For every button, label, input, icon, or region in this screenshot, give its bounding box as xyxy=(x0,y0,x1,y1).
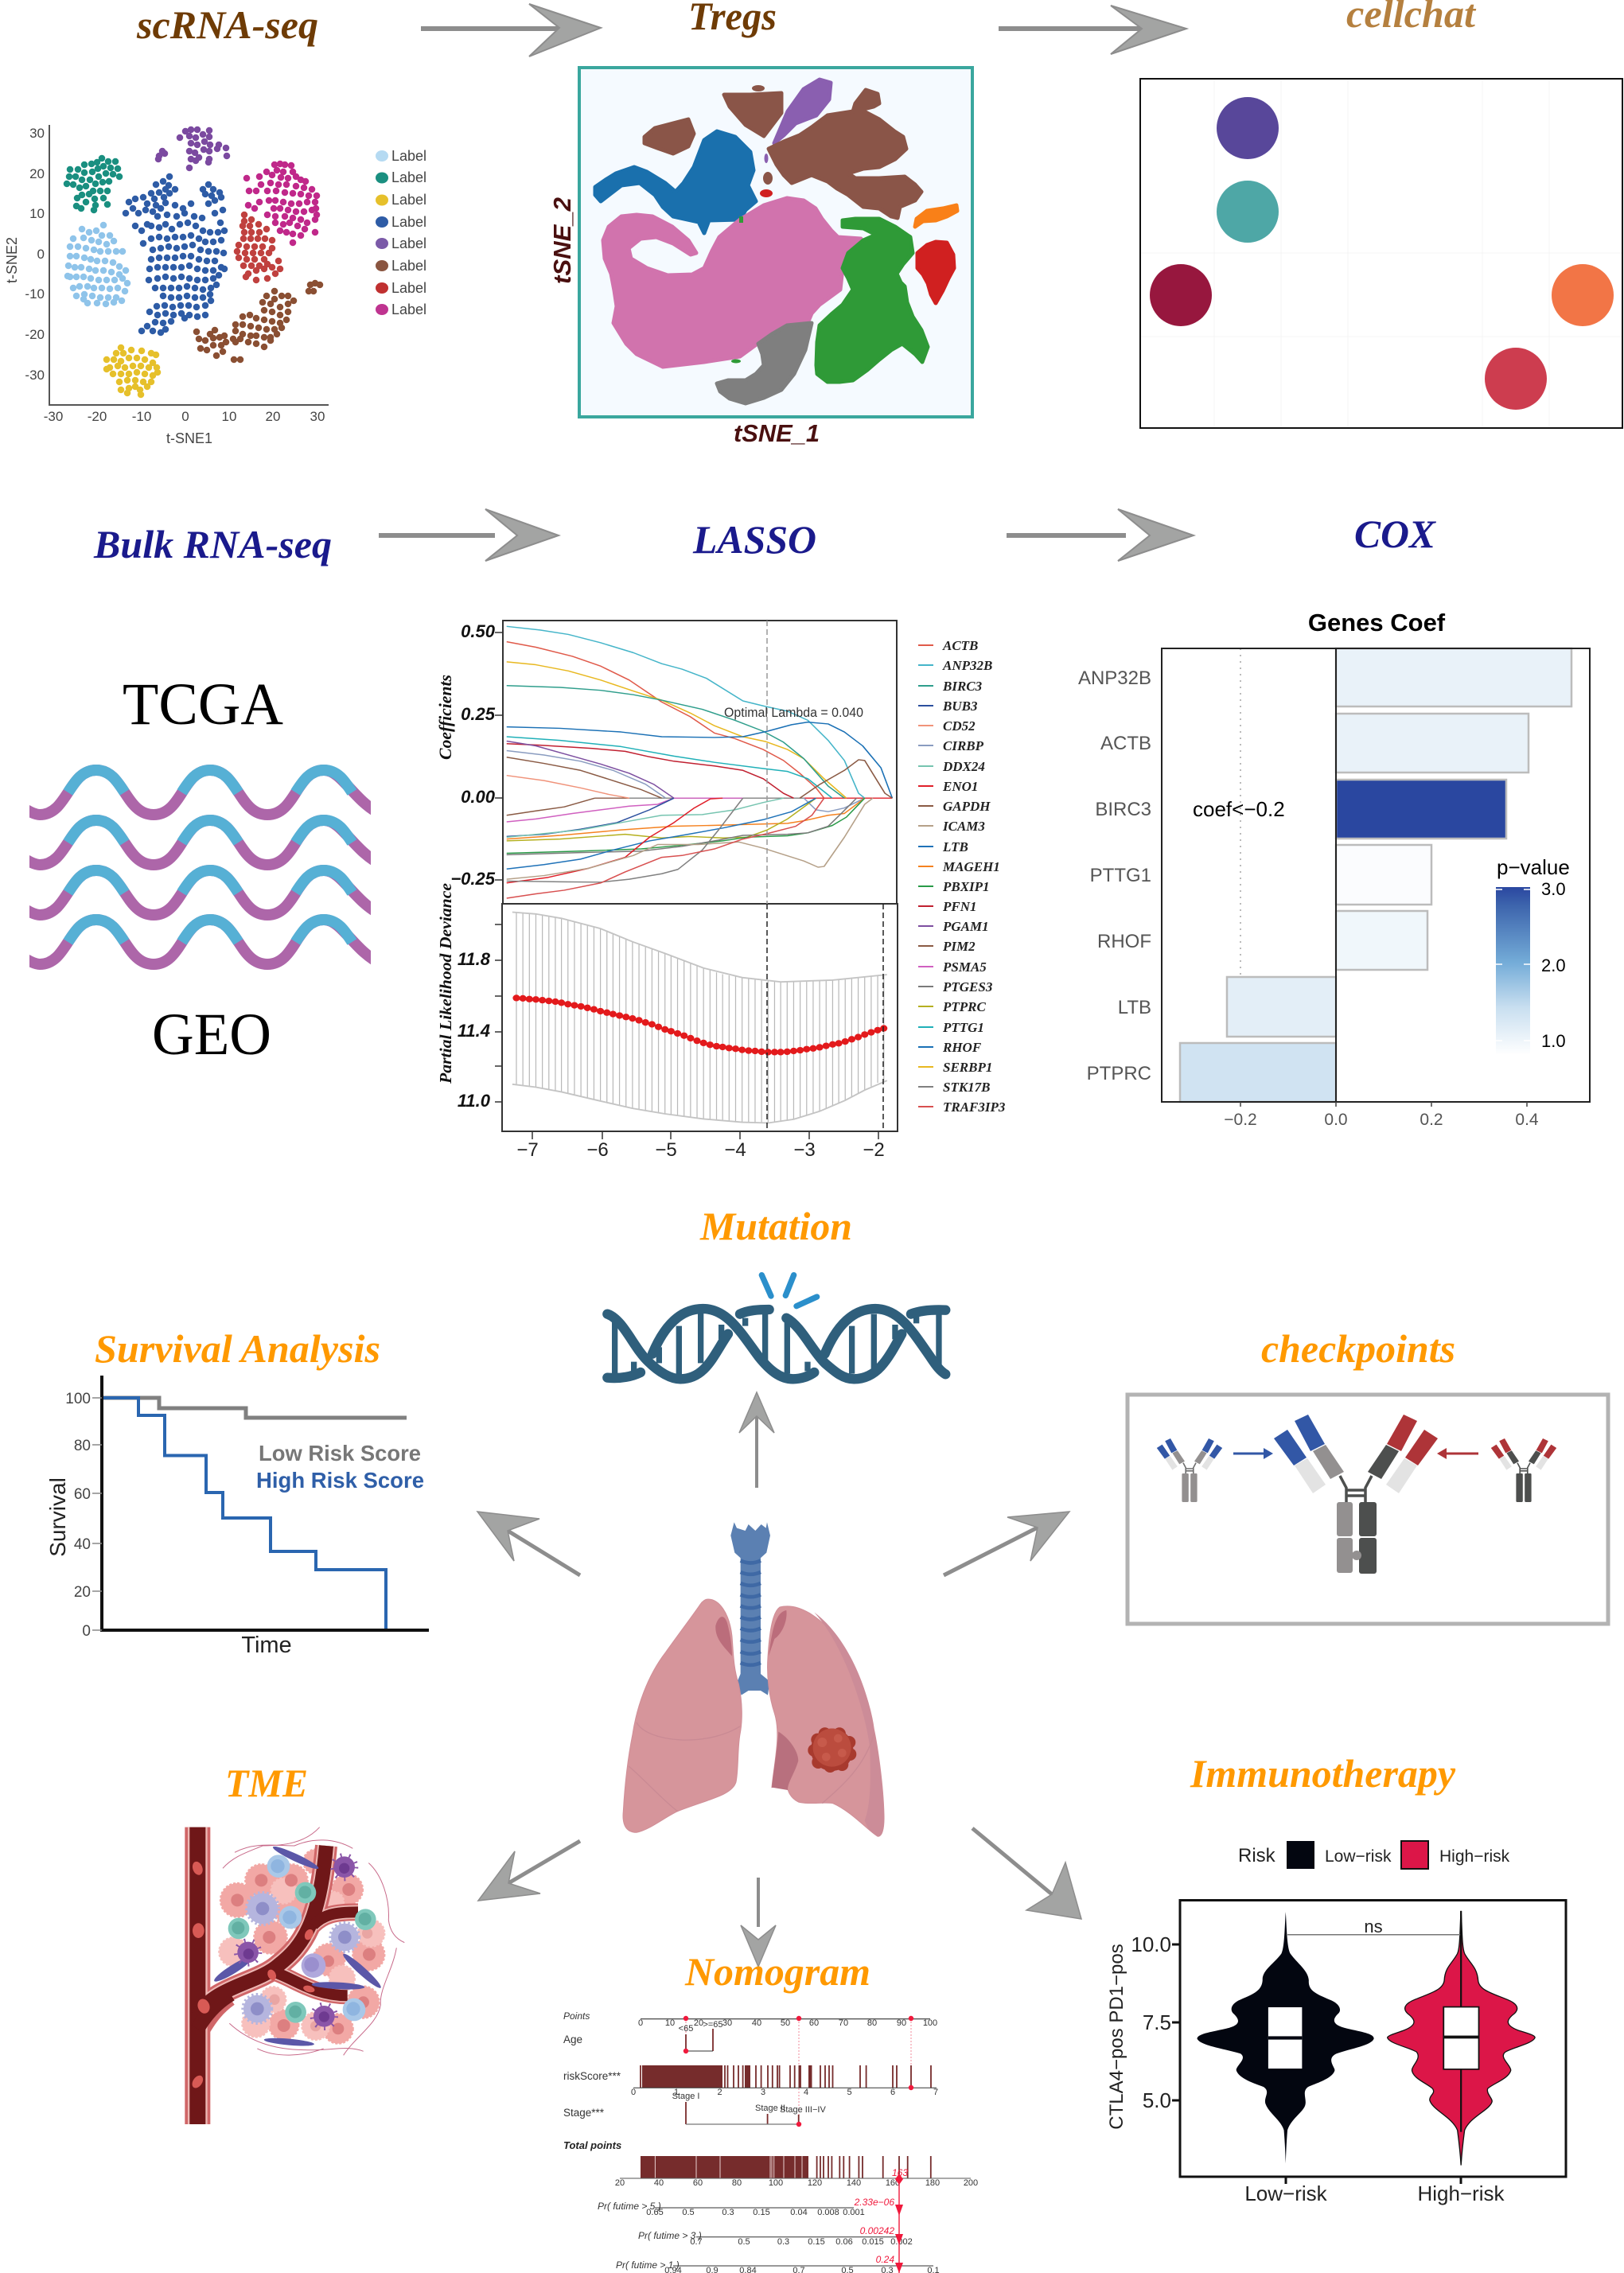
total points row: 120 xyxy=(808,2178,822,2188)
gene legend: TRAF3IP3 xyxy=(943,1100,1006,1115)
deviance error bars xyxy=(512,912,887,1123)
gene legend: LTB xyxy=(942,839,968,854)
text: GEO: GEO xyxy=(152,1002,271,1068)
futime 5 row: 0.3 xyxy=(722,2208,734,2217)
x labels: Low−risk xyxy=(1244,2182,1328,2205)
y tick labels: 20 xyxy=(29,166,45,181)
cluster: brown xyxy=(197,283,320,360)
y axis title: Survival xyxy=(45,1477,70,1557)
gene legend: ENO1 xyxy=(942,779,978,794)
points scale xyxy=(563,2010,937,2028)
y tick labels: 11.8 xyxy=(458,949,491,969)
gene labels: ACTB xyxy=(1100,733,1151,754)
antibody: large chimeric xyxy=(1274,1415,1438,1574)
cluster: magenta xyxy=(247,164,317,243)
illustration: tumour microenvironment xyxy=(190,1827,404,2124)
lilac macrophages xyxy=(243,1894,359,2022)
scatter legend: Label xyxy=(391,192,426,208)
violins xyxy=(1197,1911,1535,2166)
gene legend xyxy=(918,638,1006,1115)
plot frame and zero line xyxy=(1162,648,1590,1102)
points scale: 40 xyxy=(752,2018,761,2028)
x tick labels: −3 xyxy=(793,1139,816,1161)
y axis title: CTLA4−pos PD1−pos xyxy=(1106,1944,1127,2130)
futime 3 row: 0.06 xyxy=(835,2237,853,2247)
cluster: purple xyxy=(158,130,227,168)
points scale: 50 xyxy=(781,2018,790,2028)
tumour xyxy=(808,1727,856,1773)
x labels xyxy=(1244,2182,1505,2205)
gene legend: CD52 xyxy=(943,718,976,734)
cluster: main blue xyxy=(126,177,224,333)
points scale: 0 xyxy=(638,2018,643,2028)
points scale: 80 xyxy=(867,2018,877,2028)
threshold line xyxy=(1240,648,1241,977)
total points row: 80 xyxy=(732,2178,742,2188)
y axis titles: Coefficients xyxy=(435,675,455,760)
y ticks and labels xyxy=(65,1391,102,1640)
futime 5 row: 2.33e−06 xyxy=(854,2197,894,2208)
scatter axes xyxy=(49,125,329,405)
panel frame xyxy=(1127,1395,1608,1624)
points scale: 100 xyxy=(923,2018,937,2028)
total points row: 20 xyxy=(615,2178,625,2188)
y tick labels: -10 xyxy=(25,286,45,302)
y tick labels xyxy=(450,621,496,1111)
risk score row xyxy=(563,2065,938,2097)
scatter legend: Label xyxy=(391,302,426,317)
icon: lungs with tumour xyxy=(623,1522,884,1836)
nodes xyxy=(1150,97,1614,410)
y ticks and labels: 100 xyxy=(65,1391,91,1407)
deviance axis title: Partial Likelihood Deviance xyxy=(436,883,455,1084)
arrow: lung to mutation xyxy=(739,1392,774,1488)
cluster: light blue xyxy=(68,225,127,304)
chart: immunotherapy violin plot xyxy=(1106,1841,1566,2205)
x axis title: tSNE_1 xyxy=(734,419,820,447)
risk score row: 1 xyxy=(674,2088,679,2097)
axes xyxy=(102,1376,429,1630)
scatter legend xyxy=(376,148,426,317)
title: TME: TME xyxy=(225,1761,308,1805)
y tick labels: 11.0 xyxy=(458,1091,491,1111)
stage row: Stage I xyxy=(672,2092,699,2101)
x tick labels: 10 xyxy=(222,409,236,424)
blue lymphocytes xyxy=(267,1855,365,2021)
futime 5 row: 0.5 xyxy=(682,2208,695,2217)
chart: COX genes coefficient bars xyxy=(1078,609,1590,1129)
tumour nuclei xyxy=(231,1874,376,2034)
colour legend: 1.0 xyxy=(1541,1031,1566,1051)
total points row: 160 xyxy=(886,2178,900,2188)
total points row: 180 xyxy=(925,2178,940,2188)
red blood cells xyxy=(190,1860,315,2090)
x axis title: Time xyxy=(241,1633,292,1658)
x tick labels xyxy=(516,1139,885,1161)
y ticks and labels: 20 xyxy=(74,1584,91,1601)
title: Survival Analysis: Survival Analysis xyxy=(95,1326,380,1371)
cluster: red xyxy=(237,215,280,280)
futime 5 row: 0.15 xyxy=(753,2208,770,2217)
legend: Risk xyxy=(1238,1845,1276,1866)
risk score row: 0 xyxy=(631,2088,636,2097)
title: scRNA-seq: scRNA-seq xyxy=(136,2,318,47)
age row xyxy=(563,2020,723,2051)
chart: Tregs tSNE map xyxy=(548,68,972,447)
x tick labels: 30 xyxy=(310,409,325,424)
gene legend: MAGEH1 xyxy=(942,859,1000,874)
chart: survival curve xyxy=(45,1376,429,1658)
y axis title: tSNE_2 xyxy=(548,197,576,284)
gene labels: ANP32B xyxy=(1078,667,1151,689)
bars xyxy=(1180,648,1571,1102)
risk score row: 4 xyxy=(804,2088,808,2097)
total points row: 60 xyxy=(693,2178,703,2188)
title: Mutation: Mutation xyxy=(699,1204,852,1248)
futime 5 row: Pr( futime > 5 ) xyxy=(598,2201,661,2212)
x tick labels: -10 xyxy=(132,409,151,424)
points scale: 10 xyxy=(665,2018,675,2028)
optimal lambda label: Optimal Lambda = 0.040 xyxy=(724,705,863,720)
y tick labels: 11.4 xyxy=(458,1021,490,1041)
risk score row: 7 xyxy=(933,2088,938,2097)
y tick labels: 10.0 xyxy=(1131,1932,1171,1956)
colour legend: 2.0 xyxy=(1541,956,1566,975)
series labels: High Risk Score xyxy=(256,1468,424,1493)
chart: generic t-SNE scatter xyxy=(4,125,426,446)
arrow: Tregs to cellchat xyxy=(999,6,1186,54)
gene legend: SERBP1 xyxy=(943,1060,992,1075)
coefficient curves xyxy=(507,626,892,898)
x ticks and labels: 0.2 xyxy=(1420,1111,1443,1129)
arrow: red xyxy=(1437,1448,1478,1459)
title: Nomogram: Nomogram xyxy=(684,1949,870,1994)
gene legend: PTPRC xyxy=(942,999,986,1014)
futime 1 row xyxy=(616,2254,940,2273)
scatter legend: Label xyxy=(391,148,426,164)
waves: bulk RNA data xyxy=(24,770,382,964)
lung: right side xyxy=(768,1606,884,1836)
gene legend: GAPDH xyxy=(943,799,991,814)
x tick labels: −2 xyxy=(863,1139,885,1161)
scatter legend: Label xyxy=(391,280,426,296)
arrow: lung to survival xyxy=(477,1512,580,1575)
total points row: 40 xyxy=(654,2178,664,2188)
points scale: 90 xyxy=(897,2018,906,2028)
x ticks and labels xyxy=(1224,1102,1539,1129)
gene labels: PTTG1 xyxy=(1090,865,1151,886)
lung: left side xyxy=(623,1599,742,1832)
gene legend: PSMA5 xyxy=(942,959,987,975)
arrow: lung to checkpoints xyxy=(944,1512,1069,1575)
x tick labels: -30 xyxy=(44,409,63,424)
scatter legend: Label xyxy=(391,258,426,274)
lambda reference lines xyxy=(766,621,768,904)
stage row xyxy=(563,2092,826,2124)
colour legend: p−value xyxy=(1497,855,1570,879)
high risk curve xyxy=(102,1398,386,1629)
colour legend xyxy=(1496,855,1570,1055)
y ticks and labels: 0 xyxy=(82,1623,91,1640)
gene labels: BIRC3 xyxy=(1095,799,1151,820)
futime 3 row: 0.3 xyxy=(777,2237,789,2247)
colour legend: 3.0 xyxy=(1541,879,1566,899)
futime 5 row: 0.04 xyxy=(790,2208,808,2217)
y tick labels: -30 xyxy=(25,368,45,383)
arrow: Bulk RNA-seq to LASSO xyxy=(379,509,559,561)
x tick labels: −7 xyxy=(516,1139,539,1161)
risk score row: 6 xyxy=(890,2088,895,2097)
cluster: teal xyxy=(67,158,119,210)
icon: DNA helix with break xyxy=(607,1275,945,1379)
trachea xyxy=(730,1522,770,1695)
y ticks and labels: 80 xyxy=(74,1438,91,1454)
title: LASSO: LASSO xyxy=(692,517,816,562)
text: TCGA: TCGA xyxy=(123,671,283,738)
legend: High−risk xyxy=(1439,1847,1510,1866)
futime 5 row: 0.001 xyxy=(843,2208,865,2217)
arrow: blue xyxy=(1233,1448,1273,1459)
y tick labels xyxy=(25,126,45,383)
y tick labels: −0.25 xyxy=(450,869,496,889)
total points row: 140 xyxy=(847,2178,861,2188)
futime 3 row: 0.7 xyxy=(690,2237,703,2247)
y tick labels: -20 xyxy=(25,327,45,342)
gene legend: PTTG1 xyxy=(942,1020,984,1035)
scatter legend: Label xyxy=(391,214,426,230)
y tick labels: 10 xyxy=(29,206,45,221)
futime 3 row xyxy=(638,2225,913,2247)
stage row: Stage III−IV xyxy=(780,2105,826,2115)
futime 3 row: 0.15 xyxy=(808,2237,825,2247)
gene legend: STK17B xyxy=(943,1080,991,1095)
arrow: scRNA-seq to Tregs xyxy=(421,4,601,56)
points scale: 70 xyxy=(839,2018,848,2028)
age row: Age xyxy=(563,2034,582,2045)
gene legend: PFN1 xyxy=(942,899,977,914)
significance bracket: ns xyxy=(1364,1917,1383,1936)
gene legend: PBXIP1 xyxy=(942,879,990,894)
gene legend: ICAM3 xyxy=(942,819,985,834)
total points row: 200 xyxy=(964,2178,978,2188)
gene legend: DDX24 xyxy=(942,759,985,774)
arrow: LASSO to COX xyxy=(1007,509,1194,561)
purple dendritic cells xyxy=(237,1856,355,2027)
threshold note: coef<−0.2 xyxy=(1193,797,1285,821)
panel frame xyxy=(579,68,972,417)
x tick labels: -20 xyxy=(88,409,107,424)
futime 3 row: 0.002 xyxy=(890,2237,913,2247)
title: Bulk RNA-seq: Bulk RNA-seq xyxy=(93,522,332,566)
spindle cells xyxy=(212,1843,384,2047)
y tick labels: 7.5 xyxy=(1143,2010,1171,2034)
x ticks and labels: −0.2 xyxy=(1224,1111,1257,1129)
risk score row: 2 xyxy=(717,2088,722,2097)
risk score row: 5 xyxy=(847,2088,852,2097)
small cluster specks xyxy=(731,154,773,363)
y tick labels: 0.25 xyxy=(461,704,496,724)
plot frame and ticks xyxy=(1172,1900,1566,2184)
fibres xyxy=(223,1827,404,2055)
x ticks and labels: 0.0 xyxy=(1324,1111,1348,1129)
futime 1 row: 0.24 xyxy=(876,2254,894,2265)
futime 5 row xyxy=(598,2197,894,2217)
y tick labels: 30 xyxy=(29,126,45,141)
tumour cells xyxy=(219,1850,384,2044)
y axis title: t-SNE2 xyxy=(4,237,20,283)
risk score row: riskScore*** xyxy=(563,2070,621,2082)
prediction markers xyxy=(683,2016,913,2273)
y tick labels xyxy=(1131,1932,1171,2112)
prediction markers: 163 xyxy=(892,2167,908,2178)
futime 3 row: 0.5 xyxy=(738,2237,750,2247)
gene legend: RHOF xyxy=(942,1040,982,1055)
cluster: yellow xyxy=(107,348,158,395)
age row: <65 xyxy=(679,2024,693,2034)
total points row xyxy=(563,2139,978,2188)
futime 3 row: Pr( futime > 3 ) xyxy=(638,2230,702,2241)
x tick labels xyxy=(44,409,325,424)
arrow: lung to immunotherapy xyxy=(972,1828,1081,1919)
x tick labels: −5 xyxy=(655,1139,677,1161)
series labels xyxy=(256,1441,424,1493)
gene legend: PGAM1 xyxy=(942,919,989,934)
x axis title: t-SNE1 xyxy=(166,430,212,446)
cluster blobs xyxy=(595,80,957,403)
scatter legend: Label xyxy=(391,169,426,185)
gene labels: LTB xyxy=(1118,997,1151,1018)
title: checkpoints: checkpoints xyxy=(1261,1326,1455,1371)
dotted projection lines xyxy=(686,2018,911,2124)
series labels: Low Risk Score xyxy=(259,1441,421,1465)
legend xyxy=(1238,1841,1510,1869)
points scale: 20 xyxy=(694,2018,703,2028)
stage row: Stage*** xyxy=(563,2107,605,2119)
futime 3 row: 0.015 xyxy=(862,2237,884,2247)
legend: Low−risk xyxy=(1325,1847,1392,1866)
gene legend: CIRBP xyxy=(943,738,984,753)
antibody: small red xyxy=(1491,1438,1556,1502)
y ticks and labels: 40 xyxy=(74,1536,91,1553)
gene legend: BUB3 xyxy=(942,699,978,714)
futime 5 row: 0.65 xyxy=(646,2208,664,2217)
gene legend: PIM2 xyxy=(942,939,976,954)
curves xyxy=(102,1398,407,1418)
scatter legend: Label xyxy=(391,235,426,251)
chart: cellchat network xyxy=(1140,79,1622,428)
title: COX: COX xyxy=(1354,512,1437,556)
risk score row: 3 xyxy=(761,2088,765,2097)
panel: checkpoints antibodies xyxy=(1127,1395,1608,1624)
chart: nomogram xyxy=(563,2010,978,2273)
x tick labels: 0 xyxy=(181,409,189,424)
x tick labels: 20 xyxy=(266,409,280,424)
gene labels xyxy=(1078,667,1151,1084)
total points row: 100 xyxy=(769,2178,783,2188)
points scale: 60 xyxy=(809,2018,819,2028)
axis ticks xyxy=(495,632,878,1139)
points scale: Points xyxy=(563,2010,590,2022)
arrow: lung to nomogram xyxy=(741,1878,776,1967)
gene legend: PTGES3 xyxy=(942,979,993,994)
panel frames xyxy=(502,621,898,1131)
x tick labels: −6 xyxy=(586,1139,609,1161)
gene labels: RHOF xyxy=(1097,931,1151,952)
futime 5 row: 0.008 xyxy=(817,2208,839,2217)
futime 3 row: 0.00242 xyxy=(860,2225,894,2236)
arrow: lung to TME xyxy=(478,1841,580,1901)
x tick labels: −4 xyxy=(724,1139,746,1161)
network frame xyxy=(1140,79,1622,428)
stage row: Stage II xyxy=(755,2104,785,2113)
teal lymphocytes xyxy=(228,1882,376,2023)
gene legend: ANP32B xyxy=(942,658,992,673)
x ticks and labels: 0.4 xyxy=(1515,1111,1539,1129)
chart title: Genes Coef xyxy=(1308,609,1446,636)
gene labels: PTPRC xyxy=(1087,1063,1151,1084)
y tick labels: 0.00 xyxy=(461,787,496,807)
gene legend: BIRC3 xyxy=(942,679,983,694)
futime 1 row: Pr( futime > 1 ) xyxy=(616,2259,680,2271)
chart: LASSO coefficient and deviance xyxy=(435,621,1006,1161)
total points row: Total points xyxy=(563,2139,621,2151)
antibody: small blue xyxy=(1157,1438,1222,1502)
age row: >=65 xyxy=(703,2020,723,2030)
points scale: 30 xyxy=(722,2018,732,2028)
x labels: High−risk xyxy=(1417,2182,1505,2205)
y tick labels: 5.0 xyxy=(1143,2088,1171,2112)
vessels xyxy=(197,1827,358,2124)
y tick labels: 0 xyxy=(37,247,45,262)
y tick labels: 0.50 xyxy=(461,621,496,641)
title: Immunotherapy: Immunotherapy xyxy=(1190,1751,1456,1796)
gene legend: ACTB xyxy=(942,638,978,653)
y ticks and labels: 60 xyxy=(74,1486,91,1503)
